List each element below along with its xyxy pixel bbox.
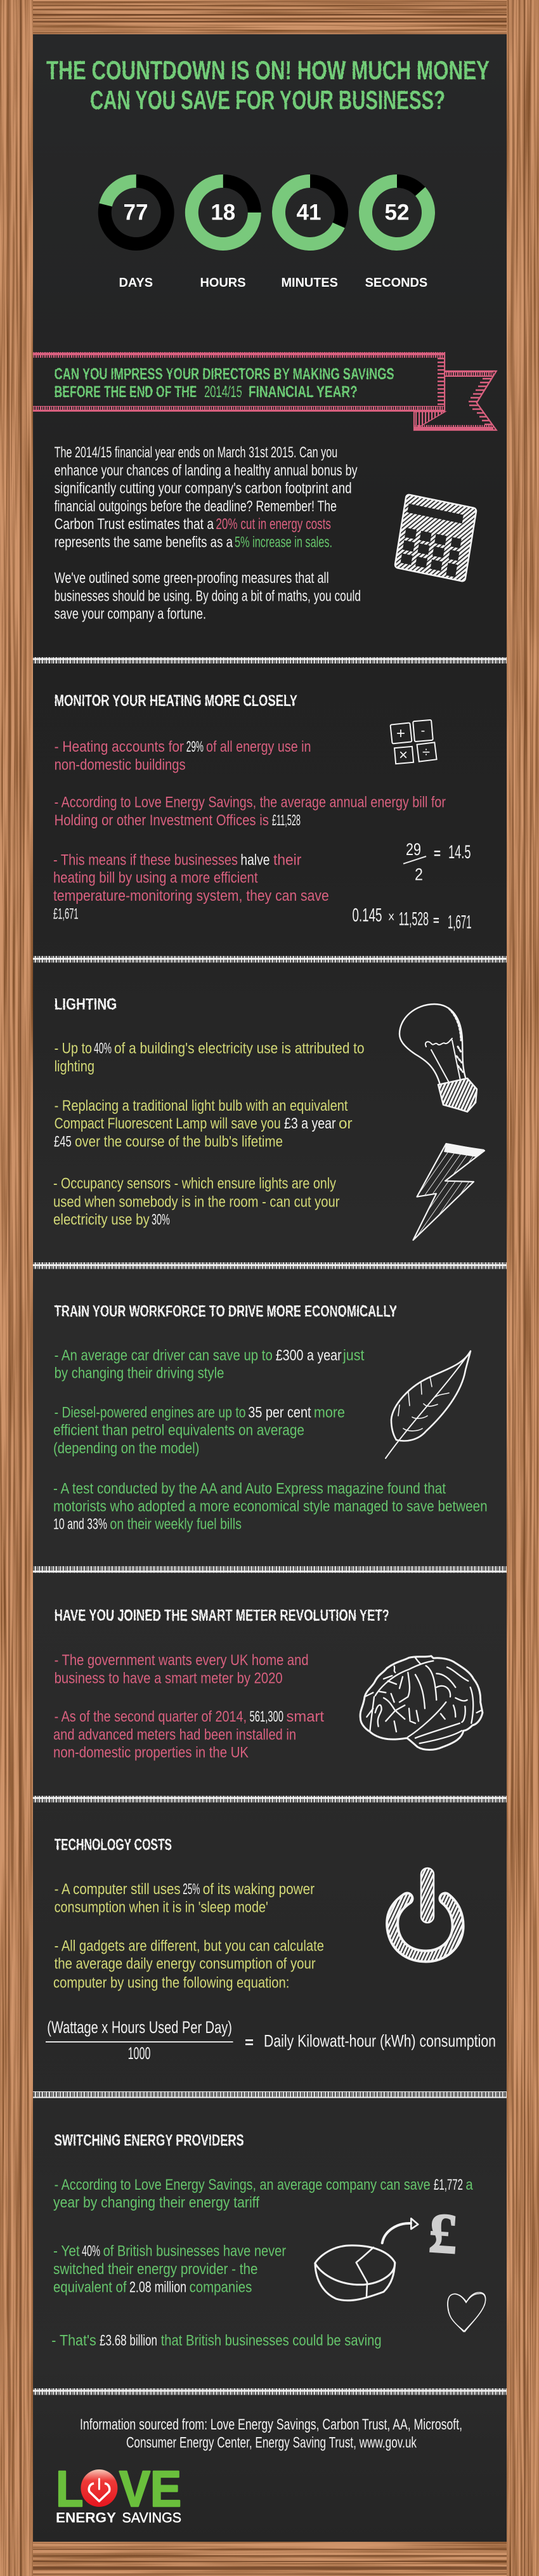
text block: switching bullets: - Yet xyxy=(53,2243,80,2260)
text block: heating bullets: - Heating accounts for xyxy=(55,738,184,755)
text block: heating bullets: of all energy use in xyxy=(206,738,311,755)
sources text: Consumer Energy Center, Energy Saving Trust, www.gov.uk xyxy=(126,2434,417,2451)
panel: intro text: save your company a fortune. xyxy=(55,606,206,623)
title xyxy=(46,55,490,115)
heading: heating: MONITOR YOUR HEATING MORE CLOSELY xyxy=(55,692,297,710)
text block: heating bullets: £1,671 xyxy=(53,905,79,922)
panel: smart meters xyxy=(53,1607,483,1762)
text block: driving bullets: 10 and 33% xyxy=(53,1516,107,1533)
panel: intro text: The 2014/15 financial year ends on March 31st 2015. Can you xyxy=(55,444,337,461)
formula: (Wattage x Hours Used Per Day) xyxy=(47,2018,232,2037)
text block: smart meter bullets: smart xyxy=(287,1708,324,1725)
text block: switching bullets: 40% xyxy=(82,2243,100,2260)
text block: switching bullets: year by changing their energy tariff xyxy=(53,2194,259,2211)
calculation: saving: = xyxy=(433,914,439,928)
logo: Love Energy Savings: VE xyxy=(119,2461,181,2517)
text block: heating bullets: £11,528 xyxy=(272,812,301,829)
text block: switching bullets xyxy=(51,2176,473,2349)
donut: days: DAYS xyxy=(119,276,153,290)
panel: intro text: businesses should be using. By doing a bit of maths, you could xyxy=(55,587,361,605)
text block: switching bullets: that British businesses could be saving xyxy=(161,2332,382,2349)
text block: lighting bullets: used when somebody is in the room - can cut your xyxy=(53,1193,340,1210)
text block: heating bullets: non-domestic buildings xyxy=(55,756,186,773)
panel: lighting xyxy=(53,996,484,1240)
text block: lighting bullets: electricity use by xyxy=(53,1211,150,1228)
icon: math symbols: - xyxy=(421,724,425,738)
text block: lighting bullets: 40% xyxy=(94,1040,112,1057)
donut: minutes xyxy=(269,171,351,290)
icon: calculator xyxy=(394,494,477,582)
text block: switching bullets: £3.68 billion xyxy=(100,2332,157,2349)
donut: days xyxy=(98,174,174,290)
icon: math symbols: × xyxy=(399,747,408,764)
ribbon heading: CAN YOU IMPRESS YOUR DIRECTORS BY MAKING SAVINGS xyxy=(55,365,394,383)
formula xyxy=(46,2018,496,2063)
ribbon heading: 2014/15 xyxy=(204,383,242,401)
text block: switching bullets: a xyxy=(465,2176,473,2194)
text block: switching bullets: £1,772 xyxy=(434,2176,463,2194)
text block: lighting bullets xyxy=(53,1040,364,1228)
icon: lightning bolt xyxy=(413,1144,484,1240)
calculation: saving: x xyxy=(388,910,394,923)
icon: pie chart xyxy=(315,2246,395,2301)
text block: driving bullets: efficient than petrol equivalents on average xyxy=(53,1422,304,1439)
panel: switching providers xyxy=(51,2132,486,2349)
text block: lighting bullets: 30% xyxy=(152,1211,170,1228)
text block: switching bullets: companies xyxy=(190,2279,252,2296)
icon: math symbols: + xyxy=(396,725,405,742)
text block: driving bullets: on their weekly fuel bills xyxy=(110,1516,242,1533)
text block: driving bullets: - An average car driver can save up to xyxy=(55,1347,273,1364)
panel: countdown xyxy=(98,168,441,290)
calculation: halving: 14.5 xyxy=(448,842,471,863)
donut: hours: HOURS xyxy=(200,276,246,290)
panel: intro text: significantly cutting your company's carbon footprint and xyxy=(55,480,352,497)
heading: technology costs: TECHNOLOGY COSTS xyxy=(55,1836,172,1854)
text block: heating bullets: heating bill by using a more efficient xyxy=(53,870,258,887)
text block: lighting bullets: over the course of the bulb's lifetime xyxy=(75,1133,283,1150)
panel: intro text: Carbon Trust estimates that a xyxy=(55,516,214,533)
panel: intro text: financial outgoings before the deadline? Remember! The xyxy=(55,498,337,515)
text block: driving bullets: (depending on the model) xyxy=(53,1440,199,1457)
text block: smart meter bullets: - The government wants every UK home and xyxy=(55,1652,309,1669)
logo: Love Energy Savings: SAVINGS xyxy=(122,2509,181,2526)
text block: technology bullets: - A computer still uses xyxy=(55,1881,181,1898)
text block: driving bullets: by changing their driving style xyxy=(55,1365,224,1382)
text block: switching bullets: - According to Love Energy Savings, an average company can save xyxy=(55,2176,431,2194)
panel: intro text: represents the same benefits as a xyxy=(55,533,233,551)
text block: lighting bullets: of a building's electricity use is attributed to xyxy=(114,1040,364,1057)
ribbon banner xyxy=(33,352,497,430)
donut: days: 77 xyxy=(124,200,148,225)
text block: technology bullets xyxy=(53,1881,324,1991)
donut: hours xyxy=(192,181,254,290)
icon: brain xyxy=(360,1656,483,1749)
donut: seconds: SECONDS xyxy=(365,276,427,290)
text block: switching bullets: switched their energy provider - the xyxy=(53,2261,257,2278)
heading: lighting: LIGHTING xyxy=(55,996,117,1014)
icon: power button xyxy=(393,1868,458,1956)
text block: technology bullets: 25% xyxy=(183,1881,200,1898)
icon: heart xyxy=(448,2292,486,2332)
text block: driving bullets xyxy=(53,1347,488,1533)
text block: smart meter bullets: non-domestic properties in the UK xyxy=(53,1744,249,1762)
text block: smart meter bullets: business to have a smart meter by 2020 xyxy=(55,1670,283,1687)
text block: lighting bullets: Compact Fluorescent Lamp will save you xyxy=(55,1115,281,1132)
text block: technology bullets: of its waking power xyxy=(203,1881,315,1898)
text block: heating bullets: - According to Love Energy Savings, the average annual energy bill for xyxy=(55,794,446,811)
donut: minutes: 41 xyxy=(297,200,321,225)
icon: math symbols: ÷ xyxy=(422,744,430,760)
text block: switching bullets: 2.08 million xyxy=(129,2279,186,2296)
text block: lighting bullets: - Occupancy sensors - which ensure lights are only xyxy=(53,1175,336,1193)
panel: intro text xyxy=(55,444,361,623)
donut: hours: 18 xyxy=(211,200,235,225)
logo: Love Energy Savings: L xyxy=(56,2461,83,2517)
donut: seconds: 52 xyxy=(385,200,409,225)
panel: intro text: 5% increase in sales. xyxy=(235,533,332,551)
logo: Love Energy Savings xyxy=(56,2461,181,2526)
panel: intro text: We've outlined some green-proofing measures that all xyxy=(55,570,329,587)
logo: Love Energy Savings: ENERGY xyxy=(56,2509,116,2526)
calculation: halving xyxy=(403,840,471,884)
text block: heating bullets: Holding or other Investment Offices is xyxy=(55,812,269,829)
text block: technology bullets: consumption when it is in 'sleep mode' xyxy=(55,1899,268,1916)
formula: 1000 xyxy=(128,2044,150,2063)
calculation: halving: = xyxy=(434,846,441,861)
calculation: halving: 2 xyxy=(415,865,423,884)
sources text xyxy=(80,2416,462,2451)
icon: pound sign: £ xyxy=(427,2202,460,2266)
panel: technology costs xyxy=(46,1836,496,2063)
heading: driving: TRAIN YOUR WORKFORCE TO DRIVE MORE ECONOMICALLY xyxy=(55,1303,397,1321)
text block: heating bullets: - This means if these businesses xyxy=(53,851,238,868)
text block: driving bullets: just xyxy=(342,1347,365,1364)
donut: seconds xyxy=(353,168,441,290)
text block: heating bullets: temperature-monitoring system, they can save xyxy=(53,887,329,905)
text block: lighting bullets: or xyxy=(339,1115,353,1132)
calculation: saving: 1,671 xyxy=(448,912,472,932)
icon: leaf xyxy=(386,1351,471,1458)
text block: lighting bullets: - Replacing a traditional light bulb with an equivalent xyxy=(55,1097,348,1115)
text block: lighting bullets: £45 xyxy=(54,1133,72,1150)
text block: smart meter bullets xyxy=(53,1652,324,1762)
text block: switching bullets: equivalent of xyxy=(53,2279,127,2296)
text block: driving bullets: 35 per cent xyxy=(248,1404,311,1421)
text block: heating bullets: 29% xyxy=(186,738,204,755)
text block: technology bullets: computer by using the following equation: xyxy=(53,1974,289,1991)
donut: minutes: MINUTES xyxy=(282,276,338,290)
formula: = xyxy=(245,2034,254,2051)
text block: lighting bullets: £3 a year xyxy=(284,1115,336,1132)
text block: driving bullets: - Diesel-powered engines are up to xyxy=(55,1404,245,1421)
text block: driving bullets: more xyxy=(314,1404,345,1421)
text block: driving bullets: £300 a year xyxy=(276,1347,342,1364)
heading: switching providers: SWITCHING ENERGY PROVIDERS xyxy=(55,2132,244,2150)
icon: math symbols xyxy=(391,720,437,764)
text block: technology bullets: - All gadgets are different, but you can calculate xyxy=(55,1937,324,1954)
panel: heating xyxy=(53,692,472,932)
panel: driving xyxy=(53,1303,488,1533)
text block: smart meter bullets: and advanced meters had been installed in xyxy=(53,1726,296,1743)
text block: driving bullets: - A test conducted by the AA and Auto Express magazine found that xyxy=(53,1480,446,1497)
panel: intro text: enhance your chances of landing a healthy annual bonus by xyxy=(55,462,358,479)
calculation: halving: 29 xyxy=(406,840,421,859)
ribbon heading: FINANCIAL YEAR? xyxy=(249,383,358,401)
text block: lighting bullets: lighting xyxy=(55,1058,94,1075)
heading: smart meters: HAVE YOU JOINED THE SMART METER REVOLUTION YET? xyxy=(55,1607,389,1625)
text block: lighting bullets: - Up to xyxy=(55,1040,92,1057)
calculation: saving: 11,528 xyxy=(399,908,429,929)
text block: heating bullets xyxy=(53,738,446,922)
text block: heating bullets: halve xyxy=(240,851,270,868)
text block: heating bullets: their xyxy=(273,851,301,868)
ribbon heading xyxy=(55,365,394,401)
calculation: saving xyxy=(353,905,472,932)
text block: technology bullets: the average daily energy consumption of your xyxy=(55,1955,316,1972)
calculation: saving: 0.145 xyxy=(353,905,382,925)
arrow xyxy=(382,2218,418,2243)
ribbon heading: BEFORE THE END OF THE xyxy=(55,383,197,401)
text block: smart meter bullets: - As of the second quarter of 2014, xyxy=(55,1708,247,1725)
panel: intro text: 20% cut in energy costs xyxy=(216,516,331,533)
text block: switching bullets: - That's xyxy=(51,2332,96,2349)
text block: smart meter bullets: 561,300 xyxy=(250,1708,283,1725)
text block: switching bullets: of British businesses have never xyxy=(103,2243,286,2260)
icon: light bulb xyxy=(399,1004,477,1112)
